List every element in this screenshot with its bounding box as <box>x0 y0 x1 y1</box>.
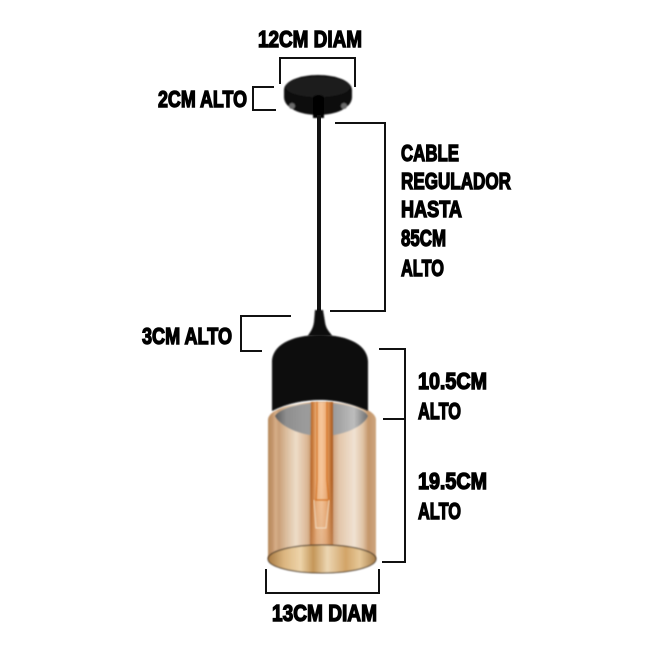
label: 10.5cm alto <box>418 368 487 424</box>
label: 2cm alto: 2CM ALTO <box>158 86 247 112</box>
grey inner top of glass <box>275 403 368 436</box>
label: 12cm diam: 12CM DIAM <box>258 26 362 52</box>
bracket: cable <box>330 123 385 311</box>
label: cable regulator: REGULADOR <box>401 168 511 194</box>
label: 10.5cm alto: 10.5CM <box>418 368 487 394</box>
shade neck <box>308 310 332 336</box>
label: 19.5cm alto: ALTO <box>418 498 461 524</box>
suspension cable <box>317 115 321 315</box>
pendant lamp infographic <box>142 30 512 622</box>
label: cable regulator <box>401 140 511 281</box>
filament bulb <box>310 402 333 546</box>
label: cable regulator: HASTA <box>401 196 462 222</box>
label: 10.5cm alto: ALTO <box>418 398 461 424</box>
bulb lower tip <box>314 500 329 528</box>
label: 19.5cm alto <box>418 468 487 524</box>
glass cylinder <box>268 402 376 559</box>
ceiling canopy <box>284 75 352 118</box>
bracket: canopy height <box>253 87 276 110</box>
label: 13cm diam: 13CM DIAM <box>272 600 377 626</box>
bracket: shade and glass heights <box>379 349 405 562</box>
label: cable regulator: CABLE <box>401 140 459 166</box>
filament wires <box>315 402 330 500</box>
bracket: glass diameter <box>266 569 379 593</box>
lamp body <box>268 310 376 573</box>
dimension brackets <box>241 58 405 593</box>
glass bottom opening <box>268 545 376 573</box>
label: 19.5cm alto: 19.5CM <box>418 468 487 494</box>
label: cable regulator: 85CM <box>401 225 446 251</box>
black shade <box>272 335 368 411</box>
label: 3cm alto: 3CM ALTO <box>142 323 232 349</box>
label: cable regulator: ALTO <box>401 255 444 281</box>
bracket: neck height <box>241 316 291 351</box>
bracket: canopy diameter <box>280 58 355 87</box>
